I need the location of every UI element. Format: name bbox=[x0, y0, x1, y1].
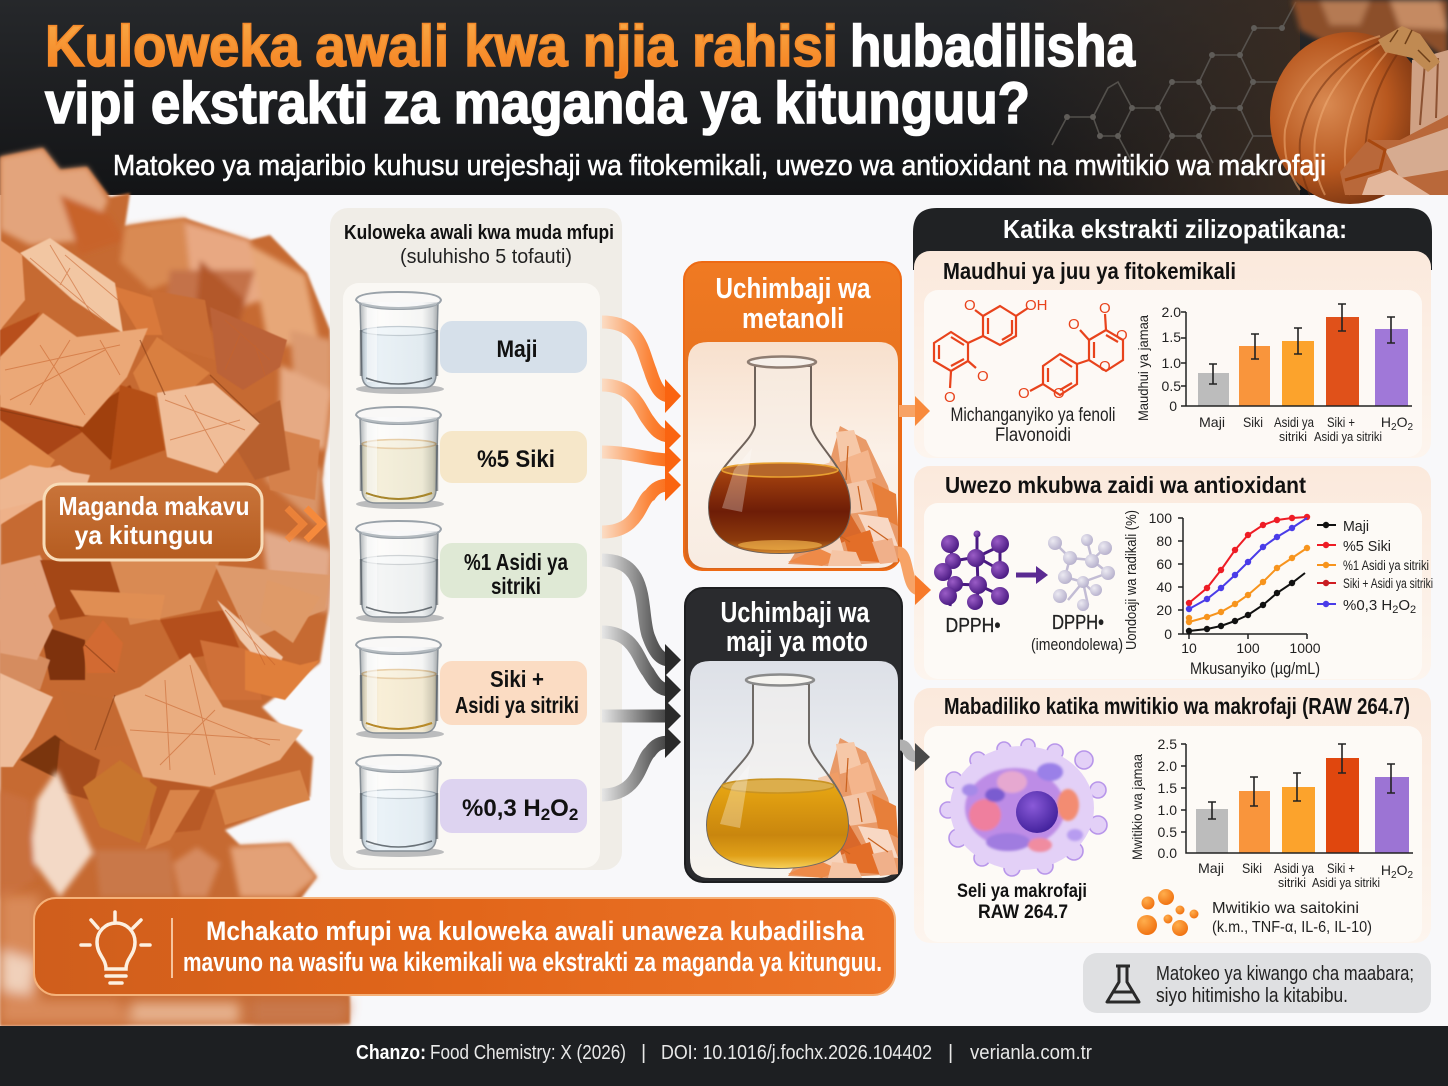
icon: cytokines bbox=[1137, 889, 1198, 936]
callout: lab note: siyo hitimisho la kitabibu. bbox=[1156, 985, 1348, 1007]
subtitle: Matokeo ya majaribio kuhusu urejeshaji wa fitokemikali, uwezo wa antioxidant na mwitikio wa makrofaji bbox=[113, 150, 1326, 182]
bar chart: phytochemicals: 1.5 bbox=[1162, 329, 1181, 345]
icon: methanol flask bbox=[709, 356, 850, 553]
icon: macrophage cell bbox=[940, 739, 1107, 876]
line chart: radical scavenging: 0 bbox=[1164, 626, 1172, 642]
mid layer shards bbox=[0, 240, 330, 835]
text: cytokines bbox=[1212, 900, 1372, 936]
bar chart: phytochemicals: 2 bbox=[1408, 422, 1414, 433]
icon: onion bulb bbox=[1270, 26, 1448, 204]
bar chart: macrophage: 2.5 bbox=[1158, 736, 1177, 752]
bar chart: phytochemicals bbox=[1135, 304, 1414, 444]
arrows: to methanol extraction bbox=[602, 322, 681, 532]
legend: chart series: O bbox=[1398, 597, 1410, 614]
bar chart: phytochemicals: O bbox=[1397, 414, 1408, 430]
bar chart: macrophage: Maji bbox=[1198, 860, 1224, 876]
text: takeaway bbox=[183, 916, 882, 977]
beaker: water bbox=[356, 292, 444, 394]
text: cytokines: (k.m., TNF-α, IL-6, IL-10) bbox=[1212, 919, 1372, 936]
bar chart: phytochemicals: 0.5 bbox=[1162, 378, 1181, 394]
bar chart: phytochemicals: H bbox=[1381, 414, 1391, 430]
beaker: hydrogen peroxide bbox=[356, 755, 444, 857]
text: takeaway: mavuno na wasifu wa kikemikali wa ekstrakti za maganda ya kitunguu. bbox=[183, 947, 882, 977]
text: macrophage label: Seli ya makrofaji bbox=[957, 881, 1087, 902]
legend: chart series: Maji bbox=[1343, 518, 1369, 535]
series: water black bbox=[1186, 573, 1305, 634]
heading: pre-soak: (suluhisho 5 tofauti) bbox=[400, 246, 572, 268]
text: DPPH labels bbox=[946, 612, 1123, 654]
title: vipi ekstrakti za maganda ya kitunguu? bbox=[45, 71, 1030, 136]
label: dried onion skins: ya kitunguu bbox=[74, 520, 214, 550]
bar chart: macrophage bbox=[1129, 736, 1414, 890]
line chart: radical scavenging: 10 bbox=[1181, 640, 1197, 656]
line chart: radical scavenging: 100 bbox=[1149, 510, 1172, 526]
bar chart: macrophage: Mwitikio wa jamaa bbox=[1129, 754, 1145, 860]
heading: methanol: metanoli bbox=[742, 303, 844, 335]
legend: chart series: %0,3 H bbox=[1343, 597, 1392, 614]
label: hydrogen peroxide: O bbox=[550, 795, 569, 822]
label: citric acid bbox=[440, 543, 587, 599]
icon: flavonoid molecules: O bbox=[1099, 358, 1111, 375]
line chart: radical scavenging bbox=[1123, 510, 1321, 678]
beaker: citric acid bbox=[356, 521, 444, 623]
arrow: to phytochemicals bbox=[899, 396, 930, 426]
label: vinegar bbox=[440, 431, 587, 483]
label: vinegar and citric acid: Asidi ya sitriki bbox=[455, 692, 579, 718]
line chart: radical scavenging: 100 bbox=[1236, 640, 1260, 656]
bar chart: phytochemicals: Siki + bbox=[1327, 414, 1355, 430]
veins bbox=[5, 245, 280, 775]
label: water: Maji bbox=[496, 336, 538, 363]
text: DPPH labels: DPPH• bbox=[946, 615, 1000, 637]
bar chart: phytochemicals: Maudhui ya jamaa bbox=[1135, 315, 1151, 421]
panel: extracts header: Katika ekstrakti zilizopatikana: bbox=[1003, 214, 1347, 244]
panel: extracts header bbox=[913, 208, 1432, 270]
icon: flavonoid molecules: O bbox=[944, 389, 956, 406]
legend: chart series: 2 bbox=[1410, 604, 1416, 616]
text: macrophage label bbox=[957, 881, 1087, 923]
bar chart: phytochemicals: 2.0 bbox=[1162, 304, 1181, 320]
panel: macrophage response bbox=[914, 688, 1431, 943]
bar chart: macrophage: 2.0 bbox=[1158, 758, 1177, 774]
arrow: chevrons to soak panel bbox=[287, 508, 322, 540]
bar chart: macrophage: Siki bbox=[1242, 860, 1262, 876]
title: hubadilisha bbox=[850, 14, 1136, 79]
label: hydrogen peroxide: 2 bbox=[541, 805, 550, 824]
icon: flavonoid molecules: OH bbox=[1025, 297, 1048, 314]
heading: phytochemicals: Maudhui ya juu ya fitokemikali bbox=[943, 258, 1236, 284]
heading: hot water: Uchimbaji wa bbox=[720, 597, 870, 629]
panel: onion skins background bbox=[0, 148, 350, 1026]
icon: flavonoid molecules: O bbox=[964, 297, 976, 314]
bar chart: phytochemicals: Asidi ya bbox=[1274, 414, 1314, 430]
bar chart: phytochemicals: 2 bbox=[1391, 422, 1397, 433]
bar chart: macrophage: Asidi ya bbox=[1274, 860, 1314, 876]
beaker: vinegar bbox=[356, 407, 444, 509]
beaker: vinegar and citric acid bbox=[356, 637, 444, 739]
bar chart: macrophage: sitriki bbox=[1278, 875, 1306, 890]
heading: hot water bbox=[720, 597, 870, 658]
footer: source bbox=[0, 1026, 1448, 1086]
blurred skins top right bbox=[1292, 0, 1448, 60]
series: vinegar citric red bbox=[1186, 514, 1310, 606]
header band bbox=[0, 0, 1448, 204]
legend: chart series bbox=[1317, 518, 1433, 616]
legend: chart series: 2 bbox=[1392, 604, 1398, 616]
heading: antioxidant: Uwezo mkubwa zaidi wa antioxidant bbox=[945, 472, 1306, 498]
heading: methanol: Uchimbaji wa bbox=[716, 273, 871, 305]
text: macrophage label: RAW 264.7 bbox=[978, 902, 1068, 923]
footer: source: Food Chemistry: X (2026) bbox=[430, 1042, 626, 1064]
label: hydrogen peroxide bbox=[440, 779, 587, 833]
panel: methanol extraction bbox=[684, 262, 901, 570]
panel: phytochemicals bbox=[914, 251, 1431, 458]
bar chart: macrophage: 2 bbox=[1408, 870, 1414, 881]
callout: lab note bbox=[1083, 953, 1431, 1013]
bar chart: macrophage: 0.0 bbox=[1158, 845, 1177, 861]
icon: flavonoid molecules: O bbox=[1068, 316, 1080, 333]
bar chart: macrophage: Asidi ya sitriki bbox=[1312, 875, 1380, 890]
line chart: radical scavenging: Uondoaji wa radikali (%) bbox=[1123, 510, 1140, 650]
icon: flavonoid molecules: O bbox=[1018, 385, 1030, 402]
text: DPPH labels: (imeondolewa) bbox=[1031, 635, 1123, 654]
label: citric acid: sitriki bbox=[491, 573, 541, 599]
icon: lab flask bbox=[1107, 966, 1139, 1002]
label: dried onion skins bbox=[44, 484, 262, 560]
text: cytokines: Mwitikio wa saitokini bbox=[1212, 900, 1359, 917]
panel: pre-soak solutions bbox=[330, 208, 622, 870]
bar chart: macrophage: 1.0 bbox=[1158, 802, 1177, 818]
icon: DPPH molecule bbox=[934, 530, 1009, 610]
text: phenol compounds: Flavonoidi bbox=[995, 425, 1071, 446]
line chart: radical scavenging: Mkusanyiko (µg/mL) bbox=[1190, 659, 1320, 678]
title: Kuloweka awali kwa njia rahisi bbox=[45, 14, 838, 79]
label: dried onion skins: Maganda makavu bbox=[58, 491, 250, 521]
icon: flavonoid molecules: O bbox=[1053, 385, 1065, 402]
bar chart: phytochemicals: Siki bbox=[1243, 414, 1263, 430]
callout: key takeaway bbox=[34, 898, 895, 995]
label: hydrogen peroxide: 2 bbox=[569, 805, 578, 824]
arrow: to macrophage bbox=[900, 743, 930, 771]
arrows: to hot water extraction bbox=[602, 560, 681, 795]
bar chart: phytochemicals: 1.0 bbox=[1162, 355, 1181, 371]
icon: scavenged DPPH molecule bbox=[1048, 534, 1115, 611]
molecular hexagon motif bbox=[1052, 2, 1296, 163]
series: peroxide blue bbox=[1186, 518, 1307, 612]
bar chart: macrophage: 1.5 bbox=[1158, 780, 1177, 796]
foreground shards bbox=[0, 238, 320, 850]
icon: flavonoid molecules: O bbox=[1099, 300, 1111, 317]
icon: light bulb bbox=[81, 912, 150, 983]
heading: hot water: maji ya moto bbox=[726, 626, 868, 658]
series: citric orange bbox=[1186, 545, 1310, 625]
arrow: to antioxidant bbox=[898, 552, 931, 605]
heading: methanol bbox=[716, 273, 871, 335]
bar chart: macrophage: 0.5 bbox=[1158, 824, 1177, 840]
label: vinegar and citric acid: Siki + bbox=[490, 666, 544, 692]
text: phenol compounds: Michanganyiko ya fenoli bbox=[950, 405, 1116, 426]
panel: hot water extraction bbox=[685, 588, 902, 882]
bar chart: macrophage: Siki + bbox=[1327, 860, 1355, 876]
blurred foreground shards bbox=[0, 770, 317, 900]
footer: source: DOI: 10.1016/j.fochx.2026.104402 bbox=[661, 1042, 932, 1064]
label: water bbox=[440, 321, 587, 373]
label: hydrogen peroxide: %0,3 H bbox=[462, 795, 541, 822]
footer: source: | bbox=[641, 1042, 646, 1064]
title bbox=[45, 14, 1136, 136]
legend: chart series: %5 Siki bbox=[1343, 538, 1391, 555]
text: phenol compounds bbox=[950, 405, 1116, 446]
footer: source: verianla.com.tr bbox=[970, 1042, 1092, 1064]
panel: antioxidant bbox=[914, 466, 1433, 680]
text: takeaway: Mchakato mfupi wa kuloweka awali unaweza kubadilisha bbox=[206, 916, 865, 946]
line chart: radical scavenging: 60 bbox=[1156, 556, 1172, 572]
bar chart: macrophage: 2 bbox=[1391, 870, 1397, 881]
heading: pre-soak: Kuloweka awali kwa muda mfupi bbox=[344, 222, 614, 244]
bar chart: phytochemicals: sitriki bbox=[1279, 429, 1307, 444]
arrow: DPPH reduction bbox=[1016, 566, 1048, 584]
icon: flavonoid molecules: O bbox=[977, 368, 989, 385]
label: citric acid: %1 Asidi ya bbox=[464, 549, 568, 575]
bar chart: macrophage: O bbox=[1397, 862, 1408, 878]
legend: chart series: %1 Asidi ya sitriki bbox=[1343, 558, 1429, 573]
label: vinegar: %5 Siki bbox=[477, 446, 555, 473]
label: vinegar and citric acid bbox=[440, 661, 587, 725]
icon: second onion bbox=[1340, 115, 1448, 195]
footer: source: | bbox=[948, 1042, 953, 1064]
footer: source: Chanzo: bbox=[356, 1042, 426, 1064]
line chart: radical scavenging: 80 bbox=[1156, 533, 1172, 549]
icon: hot water flask bbox=[707, 674, 848, 868]
bar chart: phytochemicals: 0 bbox=[1169, 398, 1177, 414]
line chart: radical scavenging: 1000 bbox=[1289, 640, 1321, 656]
text: DPPH labels: DPPH• bbox=[1052, 612, 1104, 634]
line chart: radical scavenging: 40 bbox=[1156, 579, 1172, 595]
bar chart: macrophage: H bbox=[1381, 862, 1391, 878]
heading: pre-soak bbox=[344, 222, 614, 268]
bar chart: phytochemicals: Asidi ya sitriki bbox=[1314, 429, 1382, 444]
icon: flavonoid molecules bbox=[934, 297, 1128, 406]
icon: flavonoid molecules: O bbox=[1116, 327, 1128, 344]
back layer: soft far shards bbox=[0, 148, 332, 612]
bar chart: phytochemicals: Maji bbox=[1199, 414, 1225, 430]
line chart: radical scavenging: 20 bbox=[1156, 602, 1172, 618]
